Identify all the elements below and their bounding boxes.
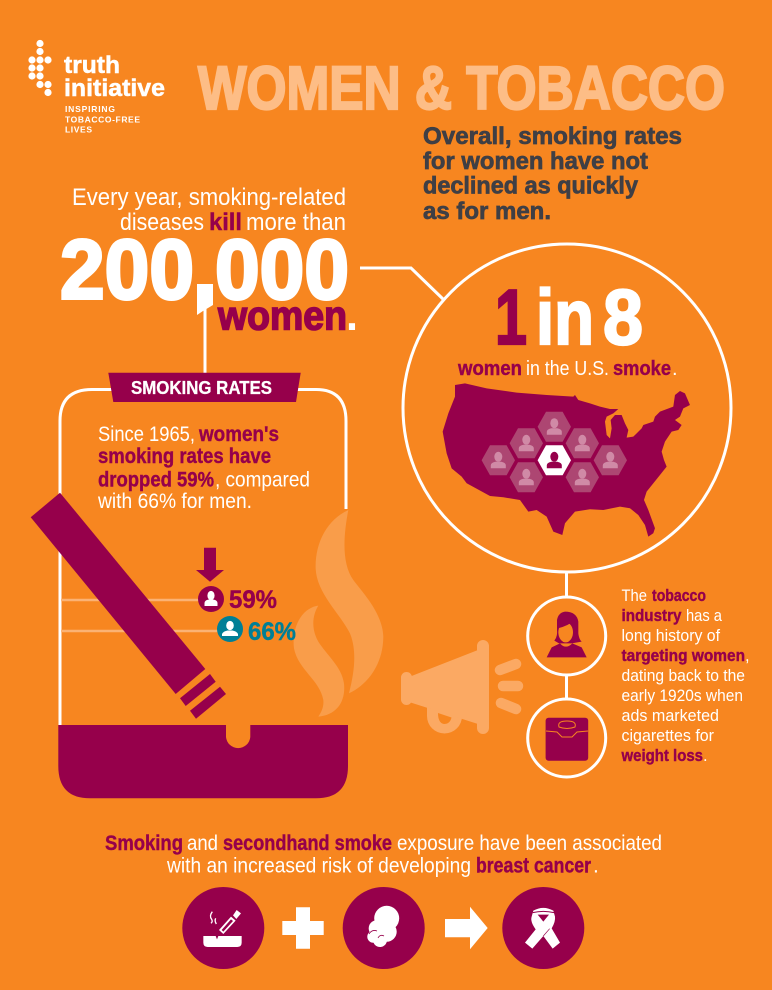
text: breast cancer risk: breast cancer [476, 854, 591, 878]
icon: secondhand smoke cloud circle [343, 887, 425, 969]
text: tobacco industry history: cigarettes for [622, 727, 714, 745]
text: breast cancer risk: . [593, 854, 599, 878]
icon: cancer ribbon circle [502, 887, 584, 969]
text: tobacco industry history: . [703, 747, 708, 765]
icon: smoke [294, 510, 383, 717]
caption: women in the U.S. smoke: in the U.S. [526, 358, 609, 380]
banner: smoking rates [108, 373, 301, 402]
big number: 200,000 women [60, 222, 358, 340]
logo tagline: LIVES [65, 124, 92, 134]
icon: weight scale in circle [528, 699, 606, 777]
caption: women in the U.S. smoke: women [457, 358, 522, 380]
caption: women in the U.S. smoke: . [672, 358, 678, 380]
text: breast cancer risk: Smoking [105, 832, 183, 855]
text: since 1965: dropped 59% [98, 468, 214, 492]
text: tobacco industry history: ads marketed [622, 707, 719, 725]
text: breast cancer risk: secondhand smoke [223, 832, 392, 855]
text: tobacco industry history: has a [686, 607, 723, 625]
text: tobacco industry history: industry [622, 607, 682, 625]
big number: 200,000 women: , [195, 244, 215, 311]
text: tobacco industry history: targeting women [622, 647, 745, 665]
text: tobacco industry history: dating back to the [622, 667, 745, 685]
text: tobacco industry history: weight loss [621, 747, 703, 765]
text: since 1965: with 66% for men. [97, 490, 252, 513]
statistic: 1 in 8 [495, 273, 643, 361]
big number: 200,000 women: 000 [215, 222, 349, 316]
text: tobacco industry history: tobacco [652, 587, 706, 605]
arrow [445, 907, 488, 949]
icon: plus [282, 907, 324, 949]
text: tobacco industry history: , [745, 647, 750, 665]
text: tobacco industry history: The [622, 587, 647, 605]
icon: down arrow [196, 548, 224, 582]
intro text: every year: kill [209, 209, 242, 236]
icon: ashtray with cigarette circle [182, 887, 264, 969]
text: since 1965: smoking rates have [98, 445, 271, 468]
logo tagline: INSPIRING [65, 104, 115, 114]
statistic: 1 in 8: 1 [495, 273, 527, 361]
big number: 200,000 women: women [217, 292, 347, 338]
icon: logo dots [28, 40, 52, 96]
panel: smoking rates ashtray [31, 373, 518, 798]
intro text: every year [72, 184, 346, 236]
stat: women 59%: 59% [229, 586, 277, 614]
stat: men 66% [217, 616, 296, 646]
icon: ashtray [58, 725, 348, 798]
icon: woman in circle [528, 597, 606, 675]
chart lines: rates [61, 600, 220, 631]
subheading: overall smoking rates [423, 123, 682, 225]
subheading: overall smoking rates: declined as quickly [423, 172, 638, 200]
logo tagline: TOBACCO-FREE [65, 114, 140, 124]
logo wordmark [64, 52, 165, 102]
text: tobacco industry history [621, 587, 750, 765]
logo wordmark: initiative [64, 75, 165, 102]
subheading: overall smoking rates: Overall, smoking rates [423, 123, 682, 150]
subheading: overall smoking rates: for women have not [423, 148, 648, 175]
text: breast cancer risk: with an increased risk of developing [166, 854, 471, 878]
text: since 1965: , compared [215, 468, 310, 492]
icon: megaphone [401, 640, 518, 734]
logo wordmark: truth [64, 52, 120, 79]
intro text: every year: more than [246, 209, 346, 236]
connector lines [205, 268, 566, 700]
stat: women 59% [198, 586, 277, 614]
text: breast cancer risk [105, 832, 662, 878]
big number: 200,000 women: 200 [60, 222, 194, 316]
text: tobacco industry history: long history of [622, 627, 720, 645]
caption: women in the U.S. smoke: smoke [613, 358, 671, 380]
text: since 1965: women's [198, 423, 279, 446]
map: United States [443, 383, 690, 537]
text: breast cancer risk: exposure have been associated [397, 832, 662, 855]
text: since 1965 [97, 423, 310, 513]
panel: 1 in 8 circle [403, 244, 731, 572]
icon: cigarette [31, 493, 226, 719]
text: since 1965: Since 1965, [98, 423, 195, 446]
statistic: 1 in 8: 8 [603, 273, 643, 361]
intro text: every year: diseases [120, 209, 204, 236]
logo tagline [65, 104, 140, 134]
statistic: 1 in 8: in [536, 273, 594, 361]
banner: smoking rates: SMOKING RATES [131, 378, 272, 398]
text: breast cancer risk: and [187, 832, 218, 855]
logo: truth initiative [28, 40, 165, 134]
big number: 200,000 women: . [346, 289, 358, 340]
intro text: every year: Every year, smoking-related [72, 184, 346, 211]
stat: men 66%: 66% [248, 618, 296, 646]
text: tobacco industry history: early 1920s when [622, 687, 743, 705]
icon group: hexagons of women [482, 412, 627, 492]
subheading: overall smoking rates: as for men. [423, 198, 551, 225]
caption: women in the U.S. smoke [457, 358, 678, 380]
